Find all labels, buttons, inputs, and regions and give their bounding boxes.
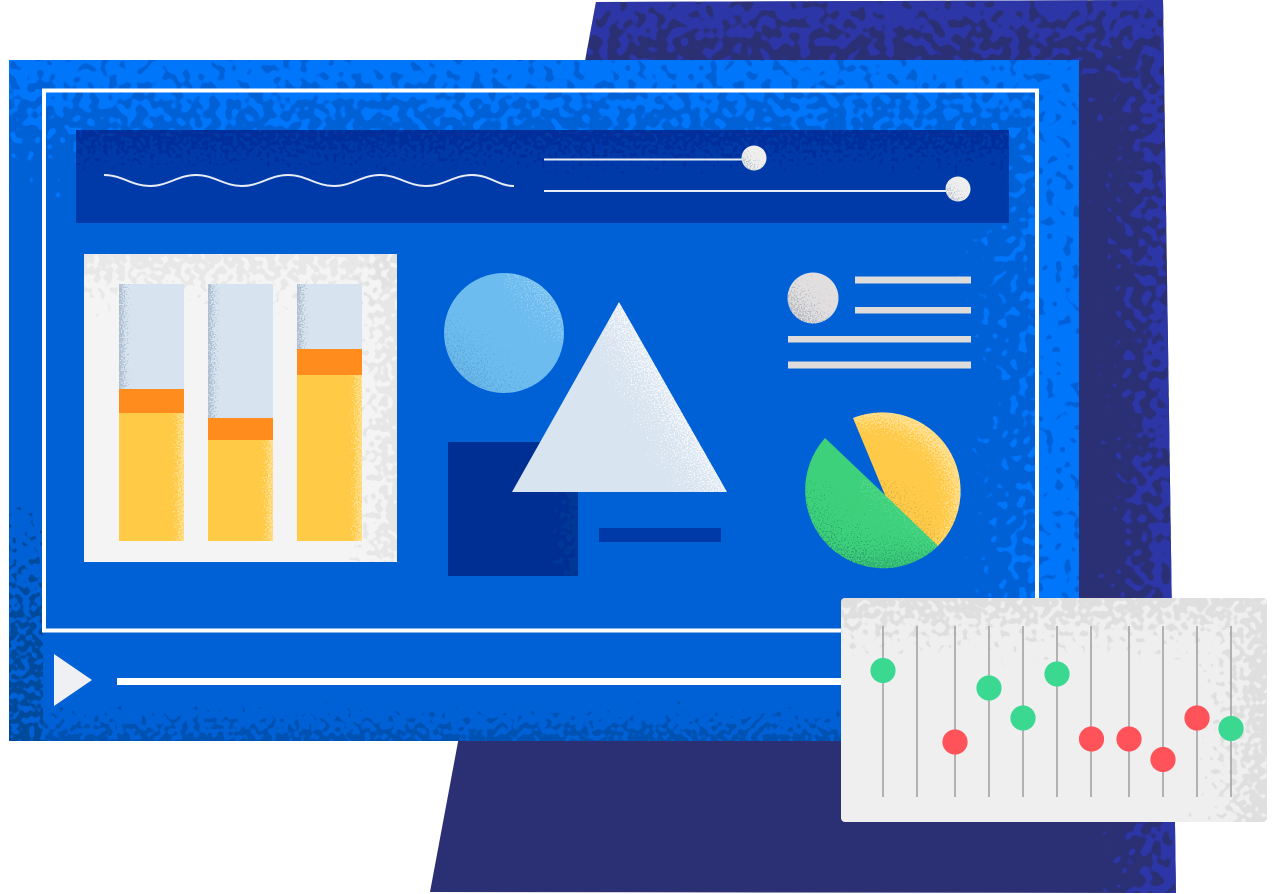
yellow slice (850, 410, 965, 550)
slider bottom (544, 176, 971, 202)
bar 3 (297, 284, 362, 541)
back panel: navy trapezoid (430, 0, 1190, 894)
red knobs (942, 705, 1210, 772)
stacked bar chart panel (84, 254, 397, 562)
bar 1 (119, 284, 184, 541)
mixer card (841, 598, 1267, 822)
header bar (76, 130, 1009, 223)
main screen panel (9, 60, 1079, 741)
progress bar (117, 678, 847, 685)
slider top (544, 145, 767, 171)
pale triangle (512, 302, 727, 492)
screen frame outline (44, 90, 1037, 630)
light blue circle (444, 273, 564, 393)
avatar circle (787, 272, 839, 324)
bar 2 (208, 284, 273, 541)
text block placeholder (787, 272, 971, 368)
play button icon (54, 654, 92, 706)
dark blue square (448, 442, 578, 576)
geometric shapes group (444, 273, 727, 576)
slider tracks (883, 626, 1231, 797)
green knobs (870, 658, 1244, 741)
pie chart (800, 410, 965, 572)
green slice (800, 438, 940, 572)
small blue bar (599, 528, 721, 542)
wavy line (104, 175, 514, 186)
